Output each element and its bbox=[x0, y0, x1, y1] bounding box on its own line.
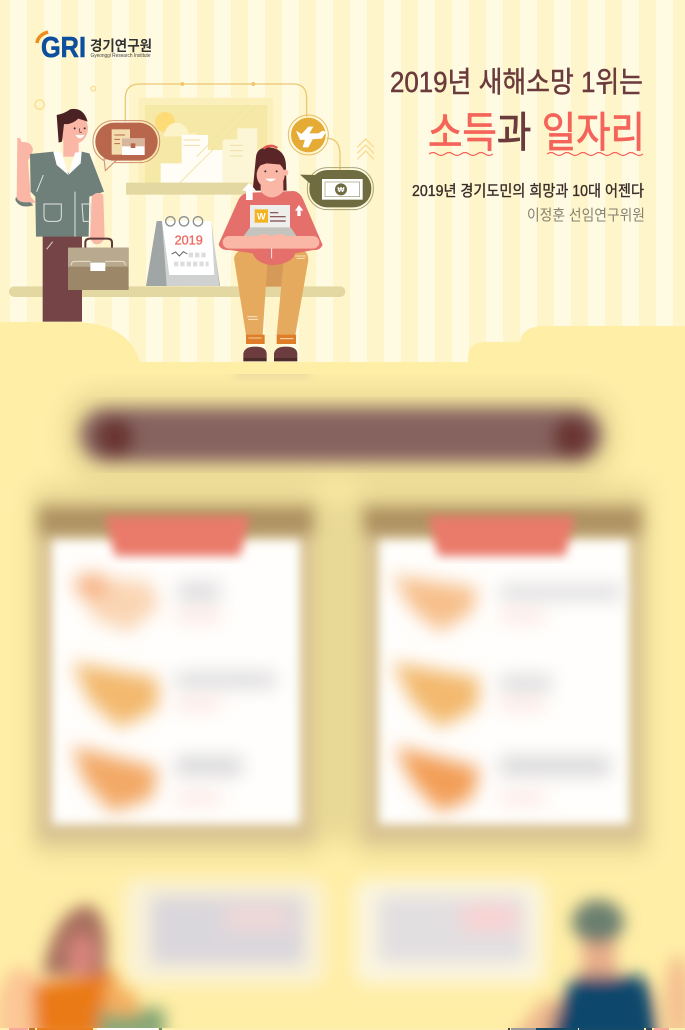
briefcase bbox=[68, 239, 129, 290]
panel: right bbox=[363, 506, 642, 842]
woman: W bbox=[257, 211, 266, 221]
logo: Gyeonggi Research Institute bbox=[90, 53, 151, 59]
logo bbox=[37, 32, 152, 64]
panel: left bbox=[38, 506, 314, 842]
calendar bbox=[146, 217, 220, 286]
speech bubble: money bbox=[300, 168, 373, 210]
blurred content area bbox=[0, 362, 685, 1030]
panel halos bbox=[32, 390, 650, 855]
title: line 2: 소득과 일자리 bbox=[428, 109, 645, 156]
note box: right bbox=[355, 880, 545, 984]
tab bbox=[105, 516, 250, 556]
bench bbox=[9, 286, 345, 297]
decorative rings bbox=[35, 86, 96, 109]
ground hills bbox=[0, 322, 685, 375]
striped background bbox=[0, 0, 685, 375]
icon: airplane bbox=[288, 115, 328, 155]
speech bubble: money: ₩ bbox=[338, 185, 345, 194]
rows bbox=[72, 573, 276, 812]
author: 이정훈 선임연구위원 bbox=[527, 207, 645, 224]
wavy underlines bbox=[429, 152, 643, 156]
connector line bbox=[125, 84, 340, 170]
illustration: office scene bbox=[9, 82, 374, 361]
rows bbox=[392, 575, 622, 812]
speech bubble: documents and briefcase bbox=[93, 121, 160, 171]
calendar: 2019 bbox=[175, 233, 203, 247]
man bbox=[15, 109, 105, 322]
logo: 경기연구원 bbox=[90, 38, 152, 55]
title: line 1: 2019년 새해소망 1위는 bbox=[390, 66, 643, 99]
person: man, navy bbox=[510, 900, 685, 1030]
chevrons bbox=[357, 139, 374, 159]
window with city view bbox=[126, 98, 273, 195]
tab bbox=[428, 516, 575, 556]
bottom edge strip bbox=[0, 1028, 685, 1030]
woman bbox=[219, 146, 323, 361]
note box: left bbox=[125, 880, 325, 984]
subtitle: 2019년 경기도민의 희망과 10대 어젠다 bbox=[412, 182, 644, 200]
top sliver bbox=[236, 374, 309, 378]
logo: GRI bbox=[41, 32, 86, 64]
person: woman, orange bbox=[0, 905, 165, 1030]
headline pill bbox=[80, 408, 602, 462]
